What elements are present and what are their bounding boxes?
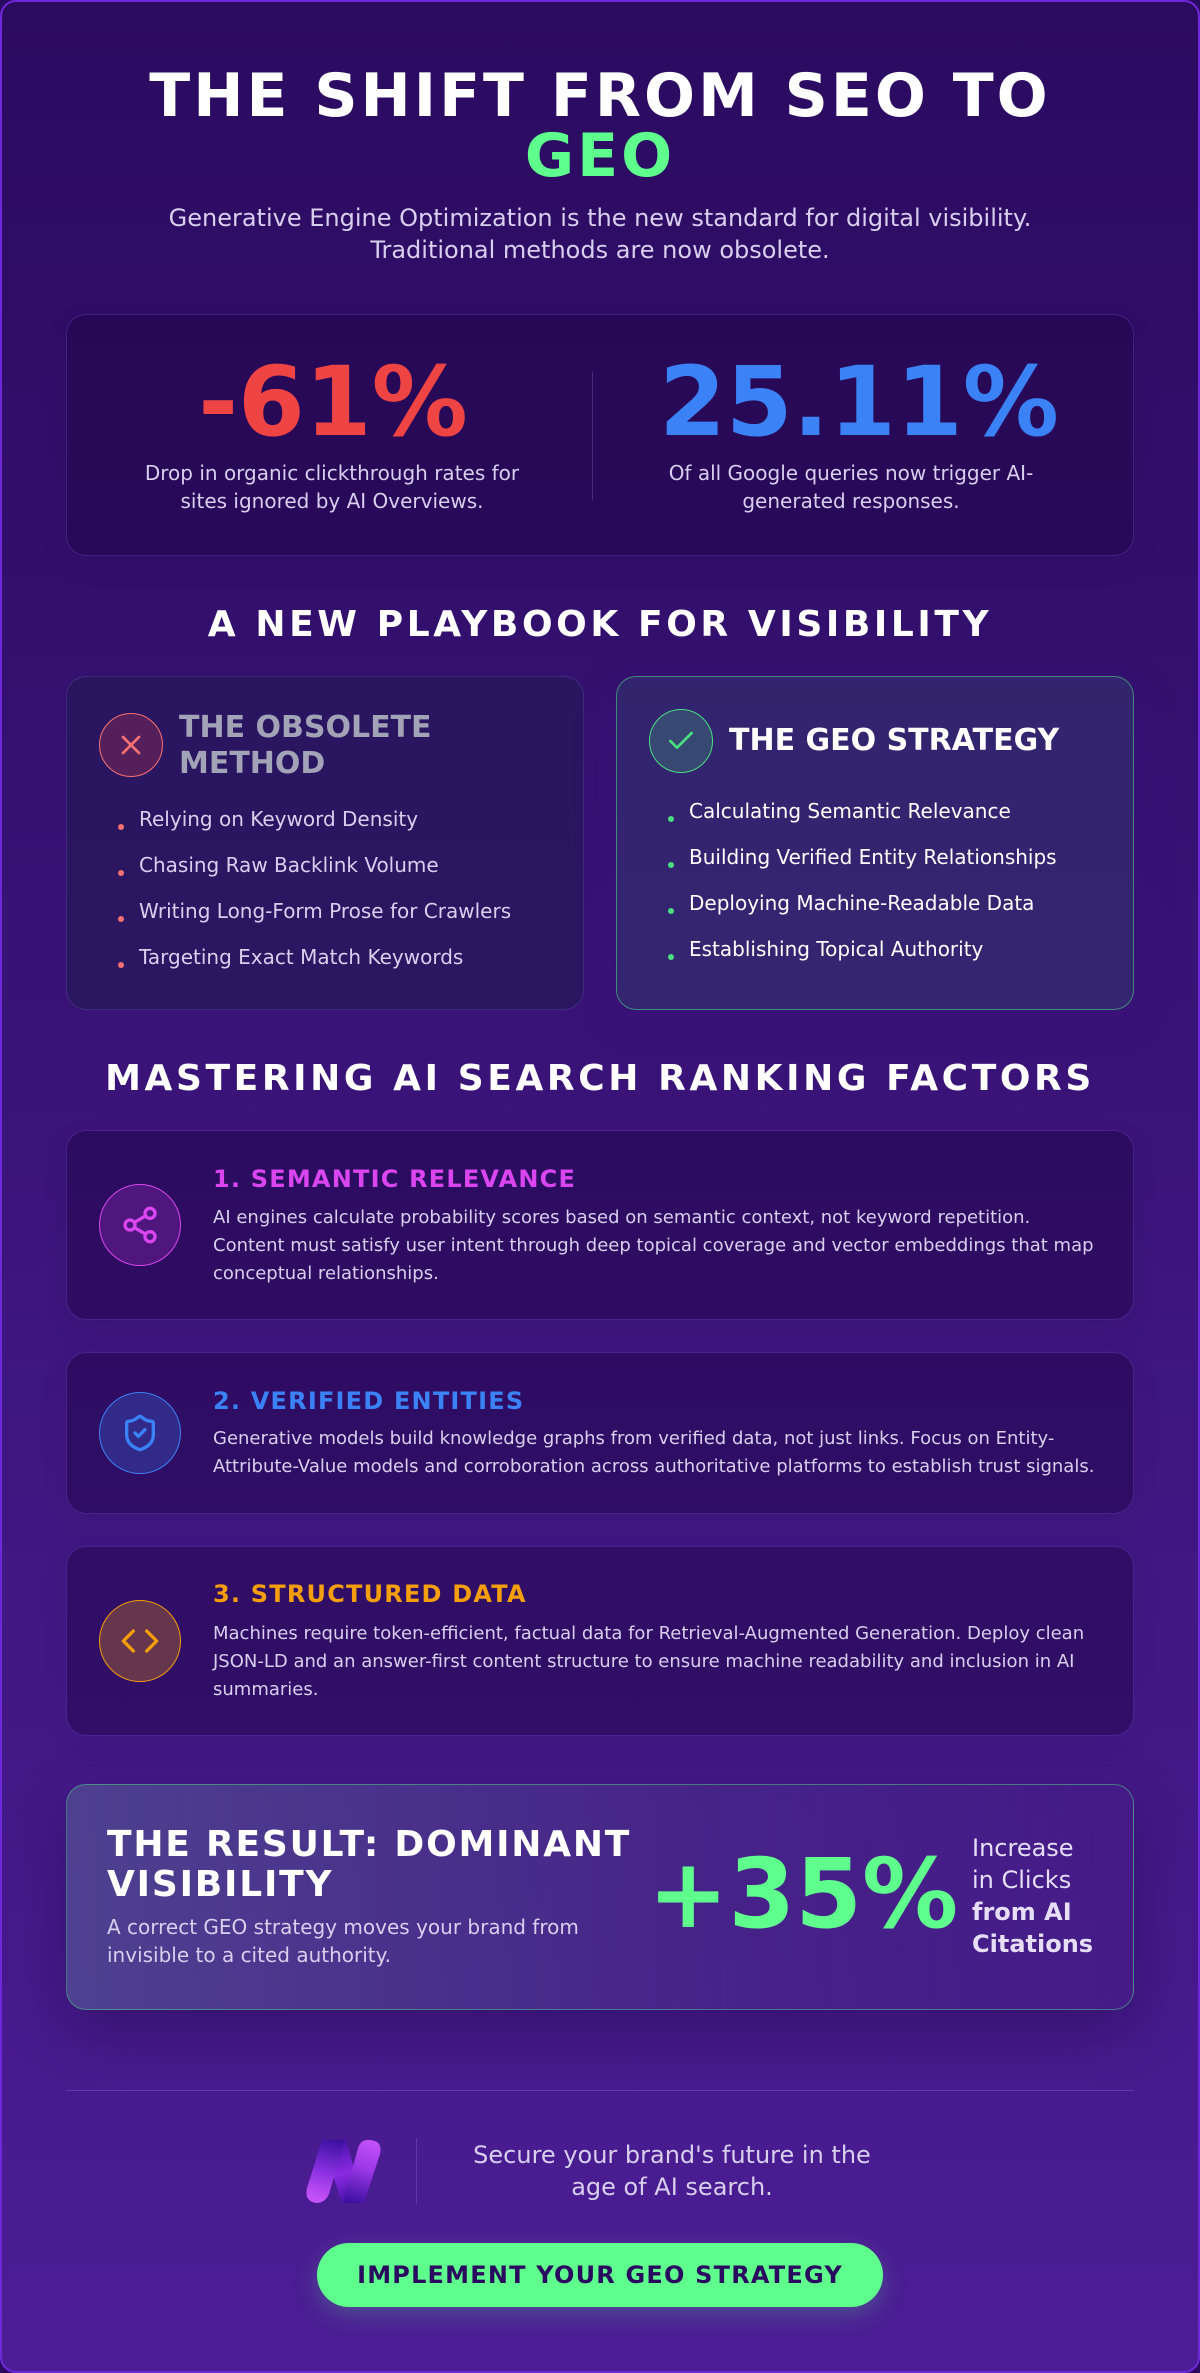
factor description: Attribute-Value models and corroboration across authoritative platforms to establish trust signals. xyxy=(213,1456,1094,1477)
list: GEO tactics: Building Verified Entity Relationships xyxy=(689,845,1057,869)
icon: brand logo xyxy=(306,2140,381,2203)
title: THE SHIFT FROM SEO TO xyxy=(149,61,1051,131)
factor description: conceptual relationships. xyxy=(213,1263,439,1284)
result heading: VISIBILITY xyxy=(107,1864,333,1905)
factor title: 1. SEMANTIC RELEVANCE xyxy=(213,1165,576,1193)
factor description xyxy=(213,1428,1094,1477)
result description: A correct GEO strategy moves your brand from xyxy=(107,1915,579,1939)
result stat label: in Clicks xyxy=(972,1866,1071,1894)
icon: red cross xyxy=(99,713,163,777)
panel: key statistics xyxy=(66,314,1134,556)
result heading: THE RESULT: DOMINANT xyxy=(107,1824,631,1865)
list: obsolete tactics: Relying on Keyword Density xyxy=(139,807,418,831)
list: GEO tactics xyxy=(668,799,1057,961)
heading: ranking factors: MASTERING AI SEARCH RANKING FACTORS xyxy=(105,1058,1095,1099)
stat caption: AI query share: Of all Google queries now trigger AI- xyxy=(669,461,1033,485)
subtitle: Generative Engine Optimization is the new standard for digital visibility. xyxy=(169,204,1031,232)
stat caption: AI query share: generated responses. xyxy=(742,489,960,513)
list: GEO tactics: Calculating Semantic Relevance xyxy=(689,799,1011,823)
footer tagline: age of AI search. xyxy=(571,2173,773,2201)
result stat label: Citations xyxy=(972,1930,1093,1958)
logo divider xyxy=(416,2138,417,2204)
panel: the GEO strategy xyxy=(616,676,1134,1010)
list: obsolete tactics: Writing Long-Form Prose for Crawlers xyxy=(139,899,511,923)
stat caption: clickthrough: sites ignored by AI Overviews. xyxy=(181,489,483,513)
factor description: Content must satisfy user intent through deep topical coverage and vector embeddings that map xyxy=(213,1235,1094,1256)
list: GEO tactics: Establishing Topical Authority xyxy=(689,937,983,961)
call to action button: IMPLEMENT YOUR GEO STRATEGY xyxy=(357,2261,843,2289)
panel: factor 1 semantic relevance xyxy=(66,1130,1134,1320)
factor description: Generative models build knowledge graphs from verified data, not just links. Focus on Entity- xyxy=(213,1428,1054,1449)
panel: the result xyxy=(66,1784,1134,2010)
heading: obsolete method: THE OBSOLETE xyxy=(179,710,432,745)
subtitle: Traditional methods are now obsolete. xyxy=(370,236,830,264)
factor description xyxy=(213,1207,1094,1284)
heading: obsolete method: METHOD xyxy=(179,746,325,781)
stat caption: clickthrough: Drop in organic clickthrough rates for xyxy=(145,461,519,485)
factor description: AI engines calculate probability scores based on semantic context, not keyword repetition. xyxy=(213,1207,1030,1228)
result stat label: Increase xyxy=(972,1834,1074,1862)
result stat: +35% xyxy=(648,1838,958,1950)
title: GEO xyxy=(525,121,675,191)
footer divider xyxy=(66,2090,1134,2091)
factor title: 3. STRUCTURED DATA xyxy=(213,1580,527,1608)
icon: share nodes xyxy=(99,1184,181,1266)
stat: AI query share: 25.11% xyxy=(659,346,1059,458)
footer tagline xyxy=(473,2141,871,2201)
stat caption: AI query share xyxy=(669,461,1033,513)
icon: green check xyxy=(649,709,713,773)
factor title: 2. VERIFIED ENTITIES xyxy=(213,1387,524,1415)
result heading xyxy=(107,1824,631,1905)
result description xyxy=(107,1915,579,1967)
result description: invisible to a cited authority. xyxy=(107,1943,391,1967)
panel: factor 2 verified entities xyxy=(66,1352,1134,1514)
stat: organic clickthrough drop: -61% xyxy=(198,346,468,458)
heading: obsolete method xyxy=(179,710,432,781)
call to action button xyxy=(317,2243,883,2307)
subtitle xyxy=(169,204,1031,264)
divider line xyxy=(592,372,593,500)
result stat label xyxy=(972,1834,1093,1958)
list: GEO tactics: Deploying Machine-Readable Data xyxy=(689,891,1034,915)
factor description: JSON-LD and an answer-first content structure to ensure machine readability and inclusion in AI xyxy=(213,1651,1074,1672)
panel: the obsolete method xyxy=(66,676,584,1010)
icon: shield check xyxy=(99,1392,181,1474)
factor description: summaries. xyxy=(213,1679,318,1700)
footer tagline: Secure your brand's future in the xyxy=(473,2141,871,2169)
panel: factor 3 structured data xyxy=(66,1546,1134,1736)
list: obsolete tactics: Targeting Exact Match Keywords xyxy=(139,945,463,969)
result stat label: from AI xyxy=(972,1898,1072,1926)
title xyxy=(149,61,1051,191)
factor description xyxy=(212,1623,1084,1700)
list: obsolete tactics xyxy=(118,807,511,969)
heading: GEO strategy: THE GEO STRATEGY xyxy=(729,723,1059,758)
heading: new playbook: A NEW PLAYBOOK FOR VISIBILITY xyxy=(208,604,992,645)
stat caption: clickthrough xyxy=(145,461,520,513)
list: obsolete tactics: Chasing Raw Backlink Volume xyxy=(139,853,439,877)
factor description: Machines require token-efficient, factual data for Retrieval-Augmented Generation. Deploy clean xyxy=(213,1623,1084,1644)
icon: code brackets xyxy=(99,1600,181,1682)
